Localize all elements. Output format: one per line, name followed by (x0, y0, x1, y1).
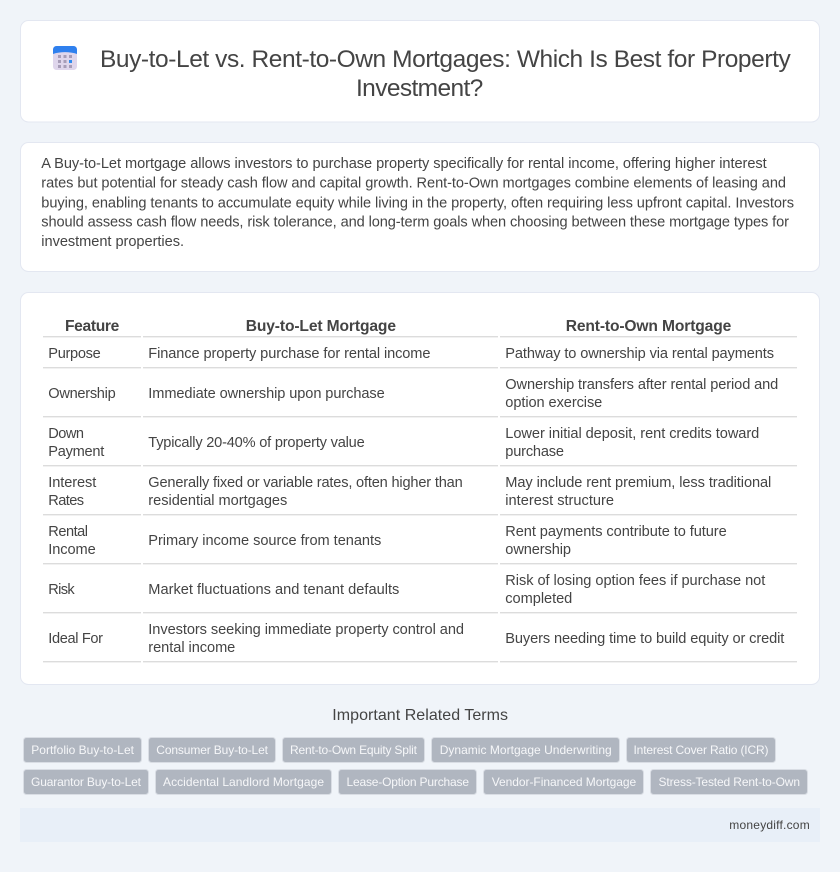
table row: interest rates: May include rent premium, less traditional (505, 475, 771, 491)
table row: interest rates: Rates (48, 493, 84, 509)
table row: ownership: Ownership (48, 386, 116, 402)
table header: Buy-to-Let Mortgage (246, 318, 396, 335)
table row: interest rates: Interest (48, 475, 96, 491)
text block: summary paragraph: A Buy-to-Let mortgage allows investors to purchase property specifically for rental income, offering higher interest (41, 156, 767, 172)
table row: risk (48, 573, 765, 607)
footer bar (20, 808, 820, 842)
tag list: related terms (24, 738, 808, 794)
table row: ideal for: Ideal For (48, 631, 103, 647)
text block: summary paragraph: investment properties. (41, 234, 184, 250)
table row: rental income: Income (48, 542, 96, 558)
table row: down payment: Typically 20-40% of property value (148, 435, 365, 451)
table row: purpose: Finance property purchase for rental income (148, 346, 431, 362)
table row: down payment: purchase (505, 444, 564, 460)
table header (65, 318, 732, 335)
tag list: related terms: Portfolio Buy-to-Let (31, 743, 135, 757)
tag list: related terms: Rent-to-Own Equity Split (290, 743, 418, 757)
text block: summary paragraph: rates but potential for steady cash flow and capital growth. Rent-to-Own mortgages combine elements of leasing and (41, 176, 786, 192)
table row: ideal for: Buyers needing time to build equity or credit (505, 631, 784, 647)
tag list: related terms: Lease-Option Purchase (346, 775, 469, 789)
table row: rental income: Primary income source from tenants (148, 533, 381, 549)
table row: ownership: option exercise (505, 395, 602, 411)
table row: interest rates: Generally fixed or variable rates, often higher than (148, 475, 463, 491)
panel: comparison table card (20, 292, 820, 684)
tag list: related terms: Interest Cover Ratio (ICR) (634, 743, 768, 757)
table row: risk: Market fluctuations and tenant defaults (148, 582, 399, 598)
table row: rental income: Rental (48, 524, 88, 540)
table row: purpose: Pathway to ownership via rental payments (505, 346, 774, 362)
panel: summary card (20, 142, 820, 272)
table row: down payment: Lower initial deposit, rent credits toward (505, 426, 759, 442)
table row: interest rates: interest structure (505, 493, 614, 509)
text block: summary paragraph (41, 156, 794, 250)
tag list: related terms: Dynamic Mortgage Underwriting (440, 743, 612, 757)
table row: risk: completed (505, 591, 572, 607)
table row: interest rates (48, 475, 771, 509)
table row: ownership: Ownership transfers after rental period and (505, 377, 778, 393)
table row: purpose (48, 346, 774, 362)
tag list: related terms: Stress-Tested Rent-to-Own (658, 775, 800, 789)
title: Investment? (356, 75, 483, 102)
table row: ownership: Immediate ownership upon purchase (148, 386, 385, 402)
heading: important related terms: Important Related Terms (332, 707, 508, 724)
table header: Feature (65, 318, 120, 335)
table row: risk: Risk (48, 582, 75, 598)
table row: ideal for (48, 622, 784, 656)
table row: interest rates: residential mortgages (148, 493, 287, 509)
table row: down payment: Payment (48, 444, 104, 460)
table header: Rent-to-Own Mortgage (566, 318, 732, 335)
table row: rental income: ownership (505, 542, 571, 558)
icon: calendar (53, 46, 77, 70)
table row: risk: Risk of losing option fees if purchase not (505, 573, 765, 589)
table row: purpose: Purpose (48, 346, 101, 362)
table row: down payment (48, 426, 759, 460)
text block: summary paragraph: buying, enabling tenants to accumulate equity while living in the property, often requiring less upfront capital. Investors (41, 196, 794, 212)
tag list: related terms: Vendor-Financed Mortgage (492, 775, 637, 789)
tag list: related terms: Consumer Buy-to-Let (156, 743, 269, 757)
panel: title card (20, 20, 820, 122)
table row: ownership (48, 377, 778, 411)
table row: down payment: Down (48, 426, 84, 442)
table row: ideal for: rental income (148, 640, 235, 656)
tag list: related terms: Accidental Landlord Mortgage (163, 775, 324, 789)
title (100, 46, 791, 102)
table row: rental income: Rent payments contribute to future (505, 524, 727, 540)
tag list: related terms: Guarantor Buy-to-Let (31, 775, 142, 789)
title: Buy-to-Let vs. Rent-to-Own Mortgages: Which Is Best for Property (100, 46, 791, 73)
text block: summary paragraph: should assess cash flow needs, risk tolerance, and long-term goals when choosing between these mortgage types for (41, 214, 789, 230)
footer bar: moneydiff.com (729, 818, 810, 832)
table row: rental income (48, 524, 727, 558)
table row: ideal for: Investors seeking immediate property control and (148, 622, 464, 638)
